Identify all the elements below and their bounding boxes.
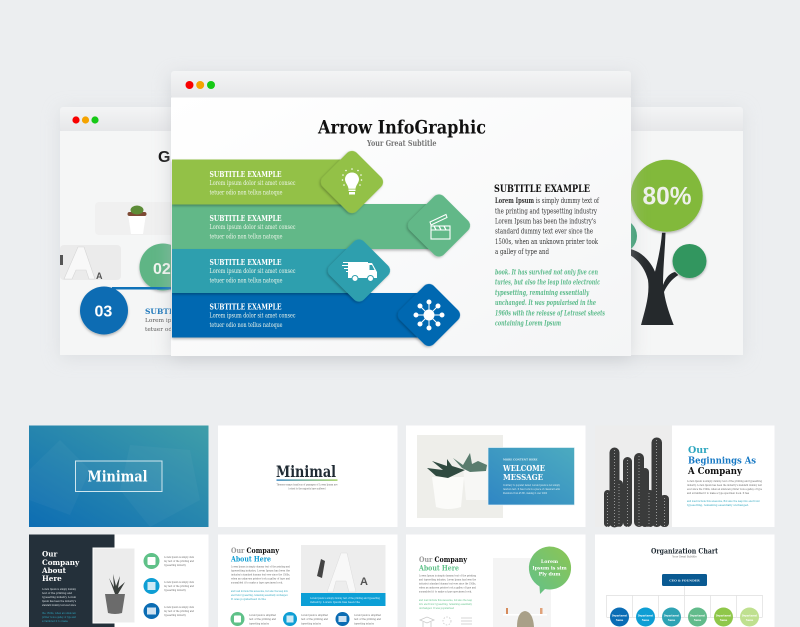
tree: 80% circle: 80%: [642, 182, 692, 210]
text block 4: Lorem ipsum dolor sit amet consec: [210, 312, 296, 320]
tree: small leaf: [672, 244, 706, 278]
text block 1: tetuer odio non tellus natoque: [210, 190, 283, 196]
thumbnail 3: welcome message: Contrary to popular belief, Lorem Ipsum is not simply: [503, 484, 560, 487]
right column paragraph: 1500s, when an unknown printer took: [495, 237, 598, 246]
subtitle: Your Great Subtitle: [366, 138, 436, 148]
thumbnail 4: our beginnings: Beginnings As: [688, 456, 756, 466]
left slide text fragment: Lorem ipsu: [145, 318, 178, 324]
department nodes: Department: [690, 614, 706, 618]
right column italic paragraph: unchanged. It was popularised in the: [495, 298, 596, 307]
text block 2: [210, 213, 296, 240]
thumbnail 6: our company about: text of the printing and: [249, 618, 276, 621]
thumbnail 4: our beginnings: and load include this awesome, But also the leap into electronic: [687, 500, 761, 503]
department nodes: Name: [720, 619, 728, 622]
department nodes: Name: [642, 619, 650, 622]
thumbnail 5: our company dark: Lorem Ipsum is simply dum: [164, 581, 195, 584]
right column italic paragraph: typesetting, remaining essentially: [495, 288, 589, 297]
diamond 1: [318, 148, 386, 216]
thumbnail 6: our company about: when an unknown printer took a galley of type and: [231, 578, 290, 580]
photo: desk and chair: [503, 608, 547, 627]
tree: 80% circle: [631, 160, 703, 232]
thumbnail 6: our company about: typesetting industry: [249, 622, 269, 626]
thumbnail 6: our company about: industry's standard dummy text ever since the 1500s,: [231, 574, 290, 576]
thumbnail 2: Minimal title: [218, 426, 398, 527]
thumbnail 4: our beginnings: typesetting, remaining essentially unchanged.: [687, 504, 749, 507]
CEO box: CEO & FOUNDER: [669, 578, 700, 582]
photo: cactus: [604, 438, 669, 528]
thumbnail 5: our company dark: typesetting industry: [164, 589, 187, 592]
thumbnail 7: about with speech bubble: industry's standard dummy text ever since the 1500s,: [419, 582, 476, 586]
circle 02: [140, 244, 186, 290]
thumbnail 4: our beginnings: Our: [688, 445, 709, 456]
thumbnail 7: about with speech bubble: Our Company: [419, 555, 468, 564]
arrow bar 3: teal: [172, 237, 393, 304]
thumbnail 6: our company about: Lorem Ipsum is simplified: [301, 614, 328, 617]
thumbnail 5: our company dark: typesetting industry: [164, 614, 187, 617]
department nodes: [610, 608, 759, 626]
thumbnail 6: our company about: [218, 534, 398, 627]
thumbnail 6: our company about: About Here: [230, 554, 271, 564]
thumbnail 3: welcome message: literature from 45 BC, making it over 2000: [503, 492, 547, 495]
photo: cactus pot: [95, 202, 175, 235]
speech bubble: Ply dum: [539, 572, 560, 578]
diamond 4: [395, 281, 463, 349]
thumbnail 5: our company dark: Lorem Ipsum is simply dummy: [42, 588, 77, 591]
right column paragraph: [495, 196, 600, 256]
thumbnail 6: our company about: electronic typesetting, remaining essentially unchanged.: [231, 594, 288, 597]
speech bubble: [529, 546, 571, 594]
thumbnail 6: our company about: Lorem Ipsum is simplified: [354, 614, 381, 617]
thumbnail 7: about with speech bubble: when an unknown printer took a galley of type and: [419, 586, 476, 590]
main browser window: [171, 71, 631, 360]
tree: left leaf: [603, 219, 637, 253]
thumbnail 5: our company dark: my text of the printing and: [164, 610, 194, 613]
left slide text fragment: SUBTIT: [145, 307, 178, 316]
text block 1: Lorem ipsum dolor sit amet consec: [210, 180, 296, 187]
thumbnail 5: our company dark: About: [41, 566, 67, 575]
thumbnail 4: our beginnings: industry. Lorem Ipsum has been the industry's standard dummy text: [687, 484, 762, 487]
thumbnail 5: our company dark: text of the printing and: [42, 592, 72, 595]
thumbnail 6: our company about: text of the printing and: [301, 618, 328, 621]
department nodes: Department: [664, 614, 680, 618]
circle 03: 03: [94, 304, 112, 320]
thumbnail 5: our company dark: the 1500s, when an unknown: [42, 612, 76, 615]
photo: letter A: A: [96, 271, 103, 281]
thumbnail 4: our beginnings: A Company: [687, 466, 742, 477]
diamond 3: [325, 237, 393, 304]
speech bubble: Lorem: [541, 559, 558, 565]
photo: letter A: [60, 245, 121, 281]
right column italic paragraph: containing Lorem Ipsum: [495, 318, 561, 328]
speech bubble: Ipsum is sim: [532, 566, 567, 572]
icon: delivery van: [342, 262, 377, 282]
thumbnail 2: Minimal title: Minimal: [276, 462, 336, 481]
thumbnail 6: our company about: scrambled it to make a type specimen book.: [231, 582, 283, 584]
text block 3: Lorem ipsum dolor sit amet consec: [210, 268, 296, 275]
thumbnail 6: our company about: industry. Lorem Ipsum has been the: [310, 601, 361, 604]
icon: clapperboard: [430, 214, 450, 239]
thumbnail 5: our company dark: [29, 534, 208, 627]
icon: light bulb: [342, 168, 362, 194]
thumbnail 4: our beginnings: Lorem Ipsum is simply dummy text of the printing and typesetting: [687, 480, 762, 483]
icons: outline row: [420, 617, 472, 627]
photo: letter A: A: [360, 576, 368, 588]
thumbnail 6: our company about: text of the printing and: [354, 618, 381, 621]
text block 3: tetuer odio non tellus natoque: [210, 278, 283, 284]
thumbnail 5: our company dark: Lorem Ipsum is simply dum: [164, 606, 195, 609]
thumbnail 3: welcome message: random text. It has roots in a piece of classical Latin: [503, 488, 560, 491]
right column italic paragraph: book. It has survived not only five cen: [495, 268, 598, 276]
thumbnail 4: our beginnings: [595, 426, 774, 528]
arrow bar 1: lime: [172, 148, 386, 216]
right column paragraph: standard dummy text ever since the: [495, 226, 593, 236]
department nodes: Name: [668, 619, 676, 622]
arrow bar 2: green: [172, 192, 473, 259]
thumbnail 5: our company dark: Our: [42, 550, 57, 558]
window controls: [186, 81, 215, 89]
right column paragraph: Lorem Ipsum has been the industry's: [495, 216, 596, 226]
thumbnail 6: our company about: typesetting industry: [301, 622, 321, 626]
thumbnail 7: about with speech bubble: and load include this awesome, but also the leap: [419, 599, 472, 602]
department nodes: Name: [694, 619, 702, 622]
thumbnail 8: organization chart: Organization Chart: [651, 546, 719, 556]
right column paragraph: a galley of type and: [495, 247, 549, 256]
right column heading: SUBTITLE EXAMPLE: [494, 184, 590, 195]
arrow bar 4: blue: [172, 281, 463, 349]
thumbnail 4: our beginnings: and scrambled it to make a type specimen book. It has: [687, 492, 750, 495]
thumbnail 6: our company about: Lorem Ipsum is simply dummy text of the printing and typesetting: [310, 597, 380, 600]
department nodes: Department: [742, 614, 758, 618]
thumbnail 4: our beginnings: ever since the 1500s, when an unknown printer took a galley of type: [687, 488, 762, 491]
thumbnail 5: our company dark: Here: [42, 574, 62, 583]
left slide heading fragment: Gr: [158, 149, 177, 166]
connector line: [112, 287, 174, 290]
department nodes: Department: [638, 614, 654, 618]
thumbnail 7: about with speech bubble: and typesetting industry. Lorem Ipsum has been the: [419, 578, 476, 582]
text block 4: [210, 302, 296, 329]
thumbnail 1: Minimal cover: Minimal: [88, 468, 148, 486]
back browser window: [60, 107, 743, 358]
thumbnail 2: Minimal title: Themes essays tussilous of passages of Lorem Ipsum are: [276, 484, 338, 486]
thumbnail 5: our company dark: Lorem Ipsum is simply dum: [164, 556, 195, 559]
thumbnail 7: about with speech bubble: About Here: [418, 564, 459, 572]
thumbnail 8: organization chart: [595, 534, 774, 627]
thumbnail 6: our company about: Lorem Ipsum is simplified: [249, 614, 276, 617]
thumbnail 6: our company about: Our Company: [231, 546, 280, 555]
text block 2: SUBTITLE EXAMPLE: [210, 213, 282, 223]
right column paragraph: Lorem Ipsum is simply dummy text of: [495, 196, 600, 205]
right column paragraph: the printing and typesetting industry: [495, 206, 597, 216]
photo: succulent pots: [417, 435, 503, 518]
title: Arrow InfoGraphic: [317, 118, 486, 138]
photo: potted plant: [105, 574, 125, 614]
thumbnail 3: welcome message: [406, 426, 586, 527]
left slide text fragment: tetuer odio: [145, 327, 178, 333]
org chart connectors: [606, 586, 762, 617]
thumbnail 5: our company dark: typesetting industry. Lorem: [42, 596, 77, 599]
right column italic paragraph: turies, but also the leap into electronic: [495, 278, 600, 286]
thumbnail 5: our company dark: Ipsum has been the industry's: [42, 600, 77, 603]
thumbnail 5: our company dark: typesetting industry: [164, 564, 187, 567]
icon: network: [414, 300, 444, 330]
thumbnail 5: our company dark: Company: [42, 558, 80, 567]
thumbnail 2: Minimal title: looked to the majority have suffered: [288, 488, 326, 490]
text block 4: tetuer odio non tellus natoque: [210, 322, 283, 329]
text block 4: SUBTITLE EXAMPLE: [210, 302, 282, 312]
thumbnail 3: welcome message: MORE CONTENT HERE: [503, 458, 538, 462]
right column italic paragraph: 1960s with the release of Letraset sheets: [495, 308, 605, 318]
right column italic paragraph: [495, 268, 605, 328]
thumbnail 5: our company dark: my text of the printing and: [164, 560, 194, 563]
text block 2: tetuer odio non tellus natoque: [210, 234, 283, 240]
thumbnail 6: our company about: typesetting industry: [354, 622, 374, 626]
thumbnail 5: our company dark: printer took a galley of type and: [42, 616, 76, 619]
thumbnail 5: our company dark: scrambled it to make: [42, 620, 68, 623]
diamond 2: [405, 192, 473, 259]
thumbnail 6: our company about: typesetting industry. Lorem Ipsum has been the: [231, 570, 291, 572]
thumbnail 7: about with speech bubble: unchanged. It was popularised: [419, 607, 454, 610]
thumbnail 5: our company dark: my text of the printing and: [164, 585, 194, 588]
thumbnail 6: our company about: It was popularised in the: [231, 598, 267, 601]
circle 03: [80, 286, 128, 334]
thumbnail 7: about with speech bubble: scrambled it to make a type specimen book.: [419, 590, 472, 594]
circle 02: 02: [153, 261, 171, 278]
thumbnail 3: welcome message: MESSAGE: [503, 472, 543, 482]
tree trunk: [630, 233, 678, 325]
text block 1: SUBTITLE EXAMPLE: [210, 169, 282, 179]
department nodes: Department: [716, 614, 732, 618]
CEO box: [662, 574, 707, 586]
department nodes: Name: [746, 619, 754, 622]
department nodes: Department: [612, 614, 628, 618]
thumbnail 1: Minimal cover: [29, 426, 208, 527]
photo: letter A: [317, 553, 368, 592]
thumbnail 6: our company about: and load include this awesome, but also the leap into: [231, 590, 288, 593]
department nodes: Name: [616, 619, 624, 622]
thumbnail 7: about with speech bubble: [406, 534, 586, 627]
thumbnail 7: about with speech bubble: Lorem Ipsum is simply dummy text of the printing: [419, 574, 476, 578]
left slide text fragment: [145, 307, 178, 333]
text block 2: Lorem ipsum dolor sit amet consec: [210, 224, 296, 231]
thumbnail 6: our company about: Lorem Ipsum is simply dummy text of the printing and: [231, 566, 290, 568]
text block 3: [210, 257, 296, 284]
text block 1: [210, 169, 296, 196]
thumbnail 3: welcome message: WELCOME: [502, 463, 545, 473]
text block 3: SUBTITLE EXAMPLE: [210, 257, 282, 267]
thumbnail 7: about with speech bubble: into electronic typesetting, remaining essentially: [419, 603, 472, 606]
thumbnail 5: our company dark: standard dummy text ever since: [42, 604, 76, 607]
thumbnail 8: organization chart: Your Great Subtitle: [671, 556, 697, 558]
